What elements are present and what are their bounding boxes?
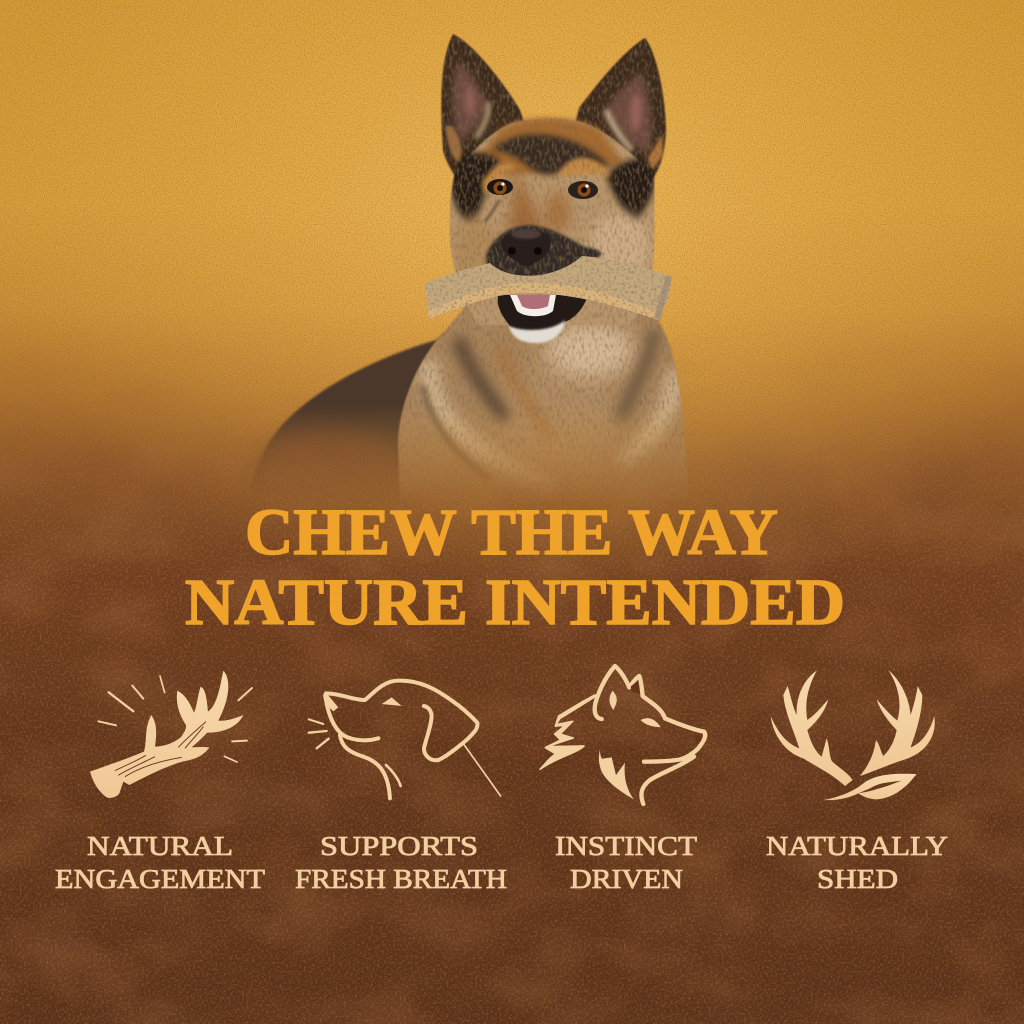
label: Natural Engagement [55,831,266,894]
title: CHEW THE WAY [245,496,778,569]
icon: shed antlers with leaf [771,670,935,800]
label: Natural Engagement: ENGAGEMENT [55,864,266,894]
muzzle [486,225,602,285]
dog head [448,118,657,325]
title: NATURE INTENDED [185,566,845,639]
left eye [487,179,513,195]
label: Natural Engagement: NATURAL [87,831,233,861]
label: Supports Fresh Breath [295,831,507,894]
label: Instinct Driven: DRIVEN [570,864,683,894]
label: Supports Fresh Breath: FRESH BREATH [295,864,507,894]
dog body and chest [251,305,687,494]
title [185,496,845,639]
right eye [568,181,598,199]
label: Naturally Shed: SHED [817,864,898,894]
nose [502,229,551,266]
label: Naturally Shed: NATURALLY [766,831,948,861]
right ear [575,38,666,180]
photo: German Shepherd dog holding an antler chew [246,34,690,520]
icon: wolf head [540,666,705,804]
icon: dog head sniffing [309,681,501,798]
left ear [441,34,525,180]
icon: antler with spark lines [90,671,252,798]
label: Instinct Driven: INSTINCT [555,831,698,861]
label: Supports Fresh Breath: SUPPORTS [320,831,478,861]
antler chew held in the mouth [425,256,672,320]
label: Instinct Driven [555,831,698,894]
open mouth with tongue and teeth [498,295,588,343]
label: Naturally Shed [766,831,948,894]
